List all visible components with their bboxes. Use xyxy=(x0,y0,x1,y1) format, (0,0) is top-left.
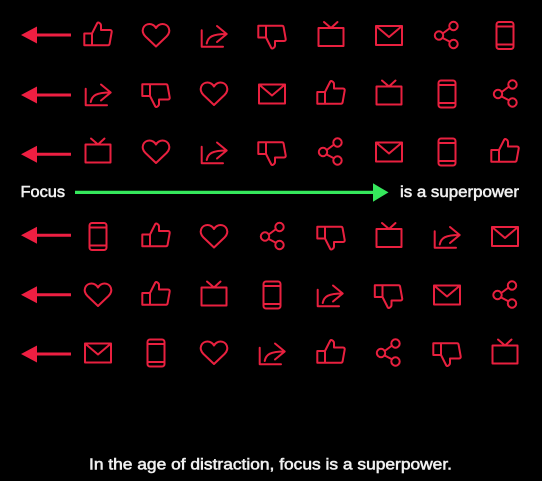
icon: share xyxy=(202,26,227,47)
icon: share xyxy=(86,84,111,105)
row 2 xyxy=(21,80,517,108)
icon: thumbs up xyxy=(142,223,170,246)
icon: share xyxy=(260,344,285,364)
icon: phone xyxy=(496,22,514,49)
icon: heart xyxy=(143,140,169,163)
red arrow row 3 xyxy=(21,146,71,163)
red arrow row 5 xyxy=(21,286,71,303)
icon: share xyxy=(318,286,343,306)
icon: thumbs down xyxy=(142,84,170,107)
icon: nodes xyxy=(494,80,517,107)
label: is a superpower: is a superpower xyxy=(400,184,519,201)
icon: thumbs down xyxy=(258,26,286,49)
icon: tv xyxy=(376,80,402,104)
icon: thumbs down xyxy=(433,343,461,366)
green arrow xyxy=(75,183,388,202)
icon: phone xyxy=(148,340,164,366)
icon: share xyxy=(435,227,460,248)
icon: thumbs up xyxy=(317,340,345,363)
icon: mail xyxy=(376,26,402,45)
icon: phone xyxy=(438,80,456,108)
red arrow row 1 xyxy=(21,26,71,44)
icon: heart xyxy=(85,284,111,306)
red arrow row 6 xyxy=(21,346,71,362)
row 3 xyxy=(21,138,519,166)
icon: nodes xyxy=(319,138,342,165)
icon: thumbs up xyxy=(84,22,112,45)
icon: thumbs up xyxy=(491,139,519,162)
icon: heart xyxy=(201,225,227,248)
red arrow row 2 xyxy=(21,86,71,104)
icon: mail xyxy=(85,344,111,362)
icon: tv xyxy=(86,138,110,162)
row 1 xyxy=(21,22,514,49)
icon: mail xyxy=(259,84,285,104)
row 5 xyxy=(21,281,516,308)
icon: mail xyxy=(434,286,460,304)
icon: thumbs down xyxy=(375,285,402,308)
icon: phone xyxy=(264,282,280,308)
row 6 xyxy=(21,339,518,366)
icon: tv xyxy=(492,340,518,364)
icon: tv xyxy=(202,282,226,306)
icon: thumbs down xyxy=(258,142,286,165)
icon: mail xyxy=(376,142,402,162)
icon: thumbs up xyxy=(142,282,170,305)
icon: heart xyxy=(201,82,227,105)
icon: tv xyxy=(318,22,344,46)
icon: mail xyxy=(492,227,518,246)
icon: share xyxy=(202,142,227,163)
label: Focus: Focus xyxy=(20,184,65,201)
icon: phone xyxy=(438,138,456,166)
caption: In the age of distraction, focus is a superpower. xyxy=(89,456,452,474)
icon: thumbs up xyxy=(317,81,345,104)
icon: thumbs down xyxy=(317,227,345,250)
icon: tv xyxy=(376,223,402,247)
icon: nodes xyxy=(261,223,284,249)
icon: nodes xyxy=(493,281,516,308)
icon: nodes xyxy=(377,339,400,366)
icon: nodes xyxy=(435,22,458,48)
icon: heart xyxy=(201,342,227,364)
icon: phone xyxy=(90,223,106,250)
red arrow row 4 xyxy=(21,227,71,244)
row 4 xyxy=(21,223,518,250)
focus line xyxy=(20,183,519,202)
icon: heart xyxy=(143,24,169,46)
